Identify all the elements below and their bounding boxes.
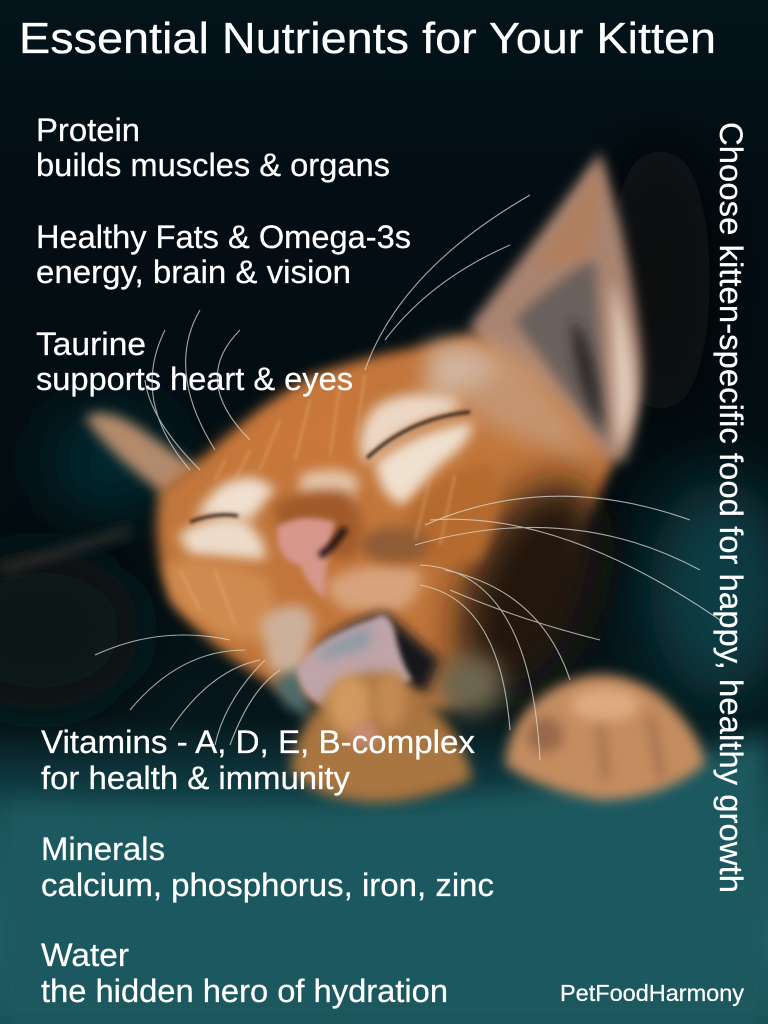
fur texture bbox=[180, 375, 455, 625]
nutrient: taurine: Taurine bbox=[36, 326, 146, 362]
nutrient: taurine bbox=[36, 326, 353, 397]
whiskers bbox=[95, 195, 720, 760]
nutrient: taurine: supports heart & eyes bbox=[36, 361, 353, 397]
tongue bbox=[297, 615, 412, 715]
kitten head bbox=[157, 335, 631, 720]
title: Essential Nutrients for Your Kitten bbox=[19, 14, 716, 63]
right eye white bbox=[375, 422, 472, 505]
nose bbox=[277, 518, 335, 598]
vertical tagline: Choose kitten-specific food for happy, healthy growth bbox=[713, 122, 749, 893]
nutrient: healthy fats bbox=[36, 219, 411, 290]
nutrient: water bbox=[41, 937, 448, 1009]
fur strip at the left bbox=[0, 530, 130, 570]
muzzle bbox=[325, 565, 421, 612]
text block: top nutrients bbox=[36, 112, 411, 397]
brand name: PetFoodHarmony bbox=[560, 980, 745, 1006]
nutrient: protein: Protein bbox=[36, 112, 140, 148]
kitten left ear bbox=[85, 413, 200, 495]
nutrient: protein bbox=[36, 112, 390, 183]
nutrient: minerals: Minerals bbox=[41, 831, 165, 867]
nutrient: protein: builds muscles & organs bbox=[36, 147, 390, 183]
nutrient: minerals bbox=[41, 831, 494, 903]
nutrient: water: Water bbox=[41, 937, 129, 973]
left cheek orange bbox=[165, 560, 280, 642]
forehead orange bbox=[215, 370, 375, 480]
nutrient: healthy fats: Healthy Fats & Omega-3s bbox=[36, 219, 411, 255]
nutrient: vitamins: for health & immunity bbox=[41, 760, 350, 796]
dark right cheek bbox=[429, 460, 631, 720]
chin cream bbox=[260, 605, 315, 680]
nutrient: vitamins: Vitamins - A, D, E, B-complex bbox=[41, 724, 475, 760]
nutrient: minerals: calcium, phosphorus, iron, zinc bbox=[41, 867, 494, 903]
white forehead stripes bbox=[195, 478, 275, 520]
closed eyes bbox=[367, 412, 470, 458]
mouth bbox=[318, 612, 440, 695]
nutrient: water: the hidden hero of hydration bbox=[41, 973, 448, 1009]
nutrient: healthy fats: energy, brain & vision bbox=[36, 254, 351, 290]
teal blanket bbox=[0, 735, 768, 1024]
ear base / pale fur bbox=[430, 344, 600, 460]
orange under right eye bbox=[405, 462, 498, 565]
dark body behind the ear bbox=[610, 140, 710, 420]
paws bbox=[290, 672, 705, 802]
kitten right ear bbox=[470, 152, 642, 480]
orange nose bridge bbox=[272, 490, 362, 560]
left eye white bbox=[178, 518, 265, 560]
nutrient: vitamins bbox=[41, 724, 475, 796]
